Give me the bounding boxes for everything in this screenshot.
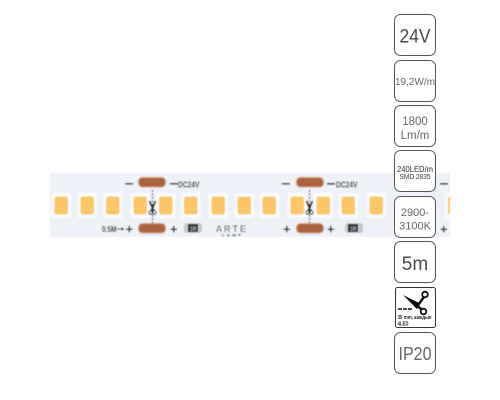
polarity and voltage markings xyxy=(102,180,448,236)
spec badge: luminous flux: Lm/m xyxy=(401,130,429,142)
ARTE LAMP logo: LAMP xyxy=(222,232,241,238)
icon: scissors xyxy=(398,292,428,314)
spec badge: ingress protection: IP20 xyxy=(398,344,432,364)
spec badge: length: 5m xyxy=(402,254,428,275)
resistors xyxy=(184,223,363,233)
spec badge: LED density: 240LED/m xyxy=(397,165,433,174)
polarity and voltage markings: 0.5M xyxy=(102,224,116,234)
spec badge: LED density: SMD 2835 xyxy=(400,174,431,181)
spec badge: cut interval: 35 mm, каждые xyxy=(398,315,432,321)
spec badge: colour temperature: 3100K xyxy=(399,220,432,232)
spec badge: cut interval: 4LED xyxy=(398,322,409,328)
LED chips xyxy=(52,193,450,218)
spec badge: LED density xyxy=(394,150,436,192)
spec badge: cut interval xyxy=(396,288,436,328)
resistors: 1R xyxy=(350,226,357,232)
polarity and voltage markings: DC24V xyxy=(178,180,200,190)
spec badge: ingress protection xyxy=(394,332,436,374)
spec badge: voltage xyxy=(394,14,436,56)
spec badge: power: 19,2W/m xyxy=(395,77,435,88)
polarity and voltage markings: + xyxy=(126,222,134,236)
cut line with scissors, left xyxy=(149,190,156,223)
spec badge: luminous flux: 1800 xyxy=(402,116,428,128)
spec badge: colour temperature xyxy=(394,196,436,238)
polarity and voltage markings: + xyxy=(283,222,291,236)
spec badge: colour temperature: 2900- xyxy=(401,207,429,219)
polarity and voltage markings: + xyxy=(327,222,335,236)
spec badge: luminous flux xyxy=(394,106,436,146)
LED strip xyxy=(50,173,450,238)
ARTE LAMP logo: ARTE xyxy=(216,224,246,234)
copper solder pads xyxy=(138,178,324,233)
spec badge: length xyxy=(394,242,436,282)
spec badge: power xyxy=(394,60,436,102)
polarity and voltage markings: + xyxy=(170,222,178,236)
resistors: 1R xyxy=(190,226,197,232)
polarity and voltage markings: DC24V xyxy=(336,180,358,190)
polarity and voltage markings: + xyxy=(440,222,448,236)
cut line with scissors, right xyxy=(306,190,313,223)
spec badge: voltage: 24V xyxy=(400,26,431,48)
